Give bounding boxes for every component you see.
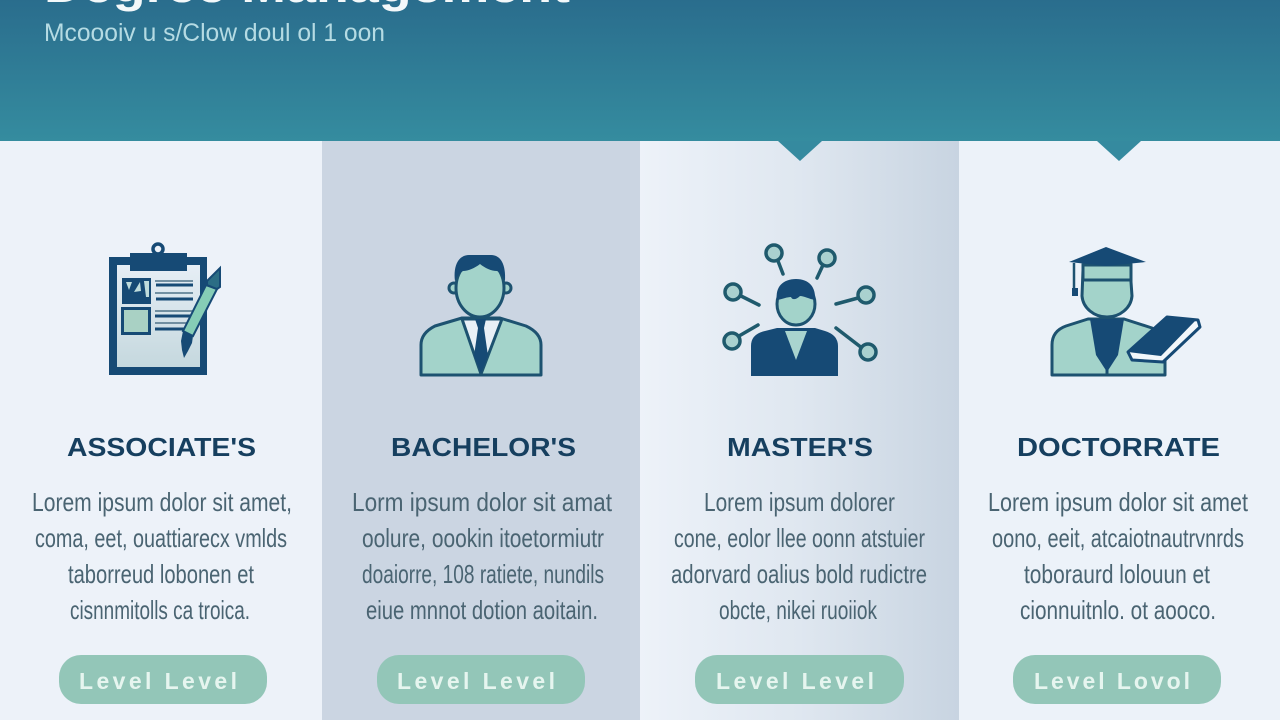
text block: [988, 487, 1249, 625]
panel: bachelor's: [322, 141, 640, 720]
text block: toboraurd lolouun et: [1024, 559, 1211, 589]
panel: associate's: [0, 141, 322, 720]
button: Level Level: [79, 668, 237, 694]
icon: clipboard with pen: [109, 244, 220, 375]
button: Level Lovol: [1034, 668, 1190, 694]
text block: Lorm ipsum dolor sit amat: [352, 487, 613, 517]
text block: coma, eet, ouattiarecx vmlds: [35, 523, 287, 553]
arrow: master's pointer: [778, 141, 822, 161]
text block: [32, 487, 292, 625]
icon: graduate with book: [1052, 247, 1200, 375]
icon: person with magnifiers: [724, 245, 876, 376]
text block: obcte, nikei ruoiiok: [719, 595, 878, 625]
heading: ASSOCIATE'S: [67, 432, 256, 462]
heading: MASTER'S: [727, 432, 873, 462]
button: [59, 655, 267, 704]
text block: [671, 487, 927, 625]
text block: taborreud lobonen et: [68, 559, 255, 589]
button: Level Level: [397, 668, 555, 694]
text block: oolure, oookin itoetormiutr: [362, 523, 604, 553]
button: [695, 655, 904, 704]
text block: [352, 487, 613, 625]
text block: Lorem ipsum dolorer: [704, 487, 895, 517]
text block: cone, eolor llee oonn atstuier: [674, 523, 925, 553]
subtitle: Mcoooiv u s/Clow doul ol 1 oon: [44, 19, 385, 47]
button: Level Level: [716, 668, 874, 694]
heading: DOCTORRATE: [1017, 432, 1220, 462]
arrow: doctorate pointer: [1097, 141, 1141, 161]
text block: adorvard oalius bold rudictre: [671, 559, 927, 589]
button: [377, 655, 585, 704]
text block: eiue mnnot dotion aoitain.: [366, 595, 598, 625]
text block: cisnnmitolls ca troica.: [70, 595, 250, 625]
panel: doctorate: [959, 141, 1280, 720]
text block: cionnuitnlo. ot aooco.: [1020, 595, 1216, 625]
text block: Lorem ipsum dolor sit amet,: [32, 487, 292, 517]
header banner: [0, 0, 1280, 161]
heading: BACHELOR'S: [391, 432, 576, 462]
panel: master's: [640, 141, 959, 720]
button: [1013, 655, 1221, 704]
text block: doaiorre, 108 ratiete, nundils: [362, 559, 604, 589]
icon: person in suit: [421, 255, 541, 375]
